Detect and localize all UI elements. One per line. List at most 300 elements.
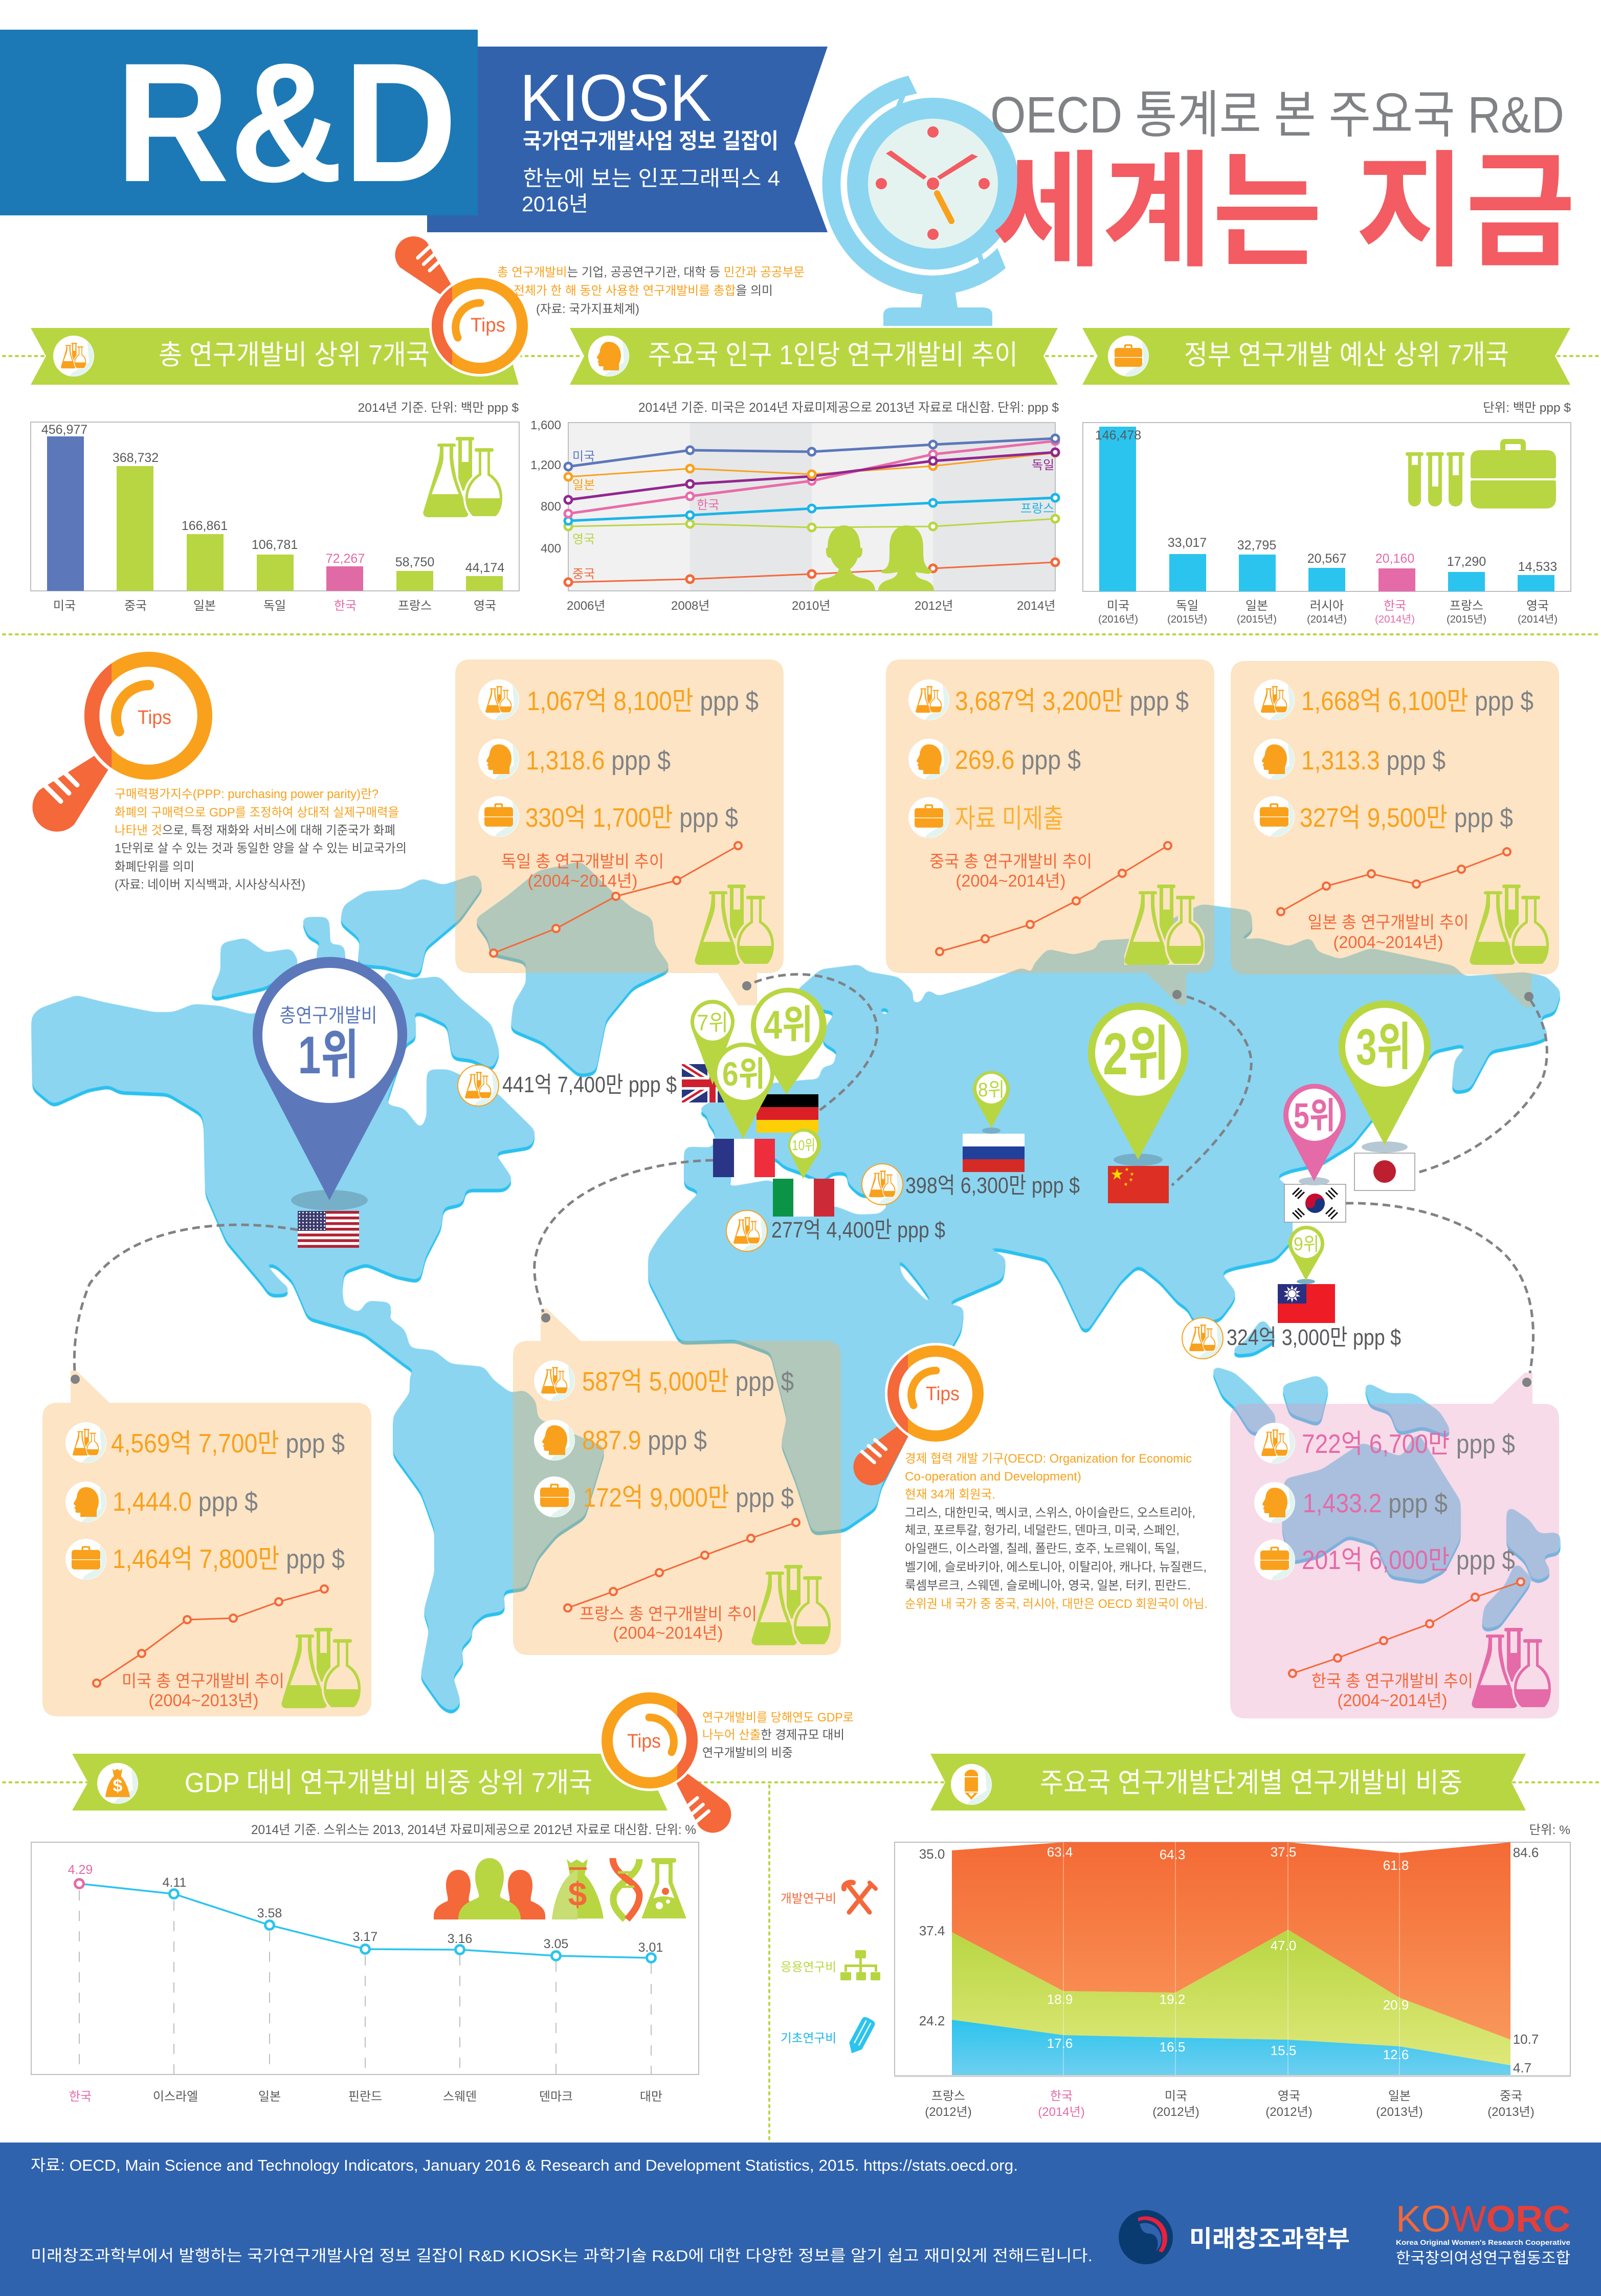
footer xyxy=(0,2143,1601,2296)
value labels: 44,174 xyxy=(465,561,504,575)
map label: UK budget xyxy=(458,1065,677,1106)
flag: China xyxy=(1108,1166,1169,1203)
footer band xyxy=(0,2143,1601,2296)
left and right labels xyxy=(919,1845,1539,2076)
pin: 6th France: 6위 xyxy=(722,1055,765,1093)
value labels: 33,017 xyxy=(1168,536,1207,550)
country labels: 러시아 xyxy=(1310,599,1344,613)
year labels: (2015년) xyxy=(1237,613,1277,625)
tips text 4: GDP ratio: 연구개발비의 비중 xyxy=(702,1746,793,1760)
map label: Taiwan budget: 324억 3,000만 ppp $ xyxy=(1227,1325,1401,1350)
left and right labels: 84.6 xyxy=(1513,1845,1539,1860)
chart frame xyxy=(31,422,519,591)
banner title: 주요국 인구 1인당 연구개발비 추이 xyxy=(648,340,1018,370)
icon: money bag: $ xyxy=(568,1875,587,1913)
inner value labels: 61.8 xyxy=(1383,1858,1409,1873)
dashed connectors xyxy=(71,975,1547,1387)
country labels xyxy=(69,2090,662,2104)
pin: 1st USA: 1위 xyxy=(298,1026,359,1085)
ministry name: 미래창조과학부 xyxy=(1189,2225,1350,2252)
figures: 269.6 ppp $ xyxy=(955,745,1081,775)
map label: Italy budget xyxy=(726,1210,945,1251)
country labels: 핀란드 xyxy=(348,2090,382,2104)
inner value labels: 12.6 xyxy=(1383,2047,1409,2062)
pin: 4th Germany xyxy=(751,988,827,1094)
tips text 2: PPP: 화폐의 구매력으로 GDP를 조정하여 상대적 실제구매력을 xyxy=(115,806,399,820)
chart note: 2014년 기준. 스위스는 2013, 2014년 자료미제공으로 2012년 자료로 대신함. 단위: % xyxy=(251,1823,696,1837)
development research area xyxy=(952,1842,1510,2040)
panel: Korea xyxy=(1254,1423,1552,1710)
trend line xyxy=(490,842,742,957)
icon: money bag xyxy=(552,1859,604,1919)
icon: flasks xyxy=(751,1565,832,1646)
panel: Japan xyxy=(1254,679,1550,966)
year labels xyxy=(1098,613,1558,625)
country labels: 한국 xyxy=(1384,599,1406,613)
pin: 9th Taiwan: 9위 xyxy=(1294,1233,1319,1254)
year labels: (2014년) xyxy=(1307,613,1347,625)
badges xyxy=(478,679,519,837)
value labels xyxy=(1095,428,1557,574)
chart frame xyxy=(895,1842,1570,2076)
year labels: (2012년) xyxy=(925,2105,972,2119)
figures: 587억 5,000만 ppp $ xyxy=(582,1367,794,1397)
tips text 3: OECD: 아일랜드, 이스라엘, 칠레, 폴란드, 호주, 노르웨이, 독일, xyxy=(905,1542,1180,1556)
logo: ministry emblem xyxy=(1119,2210,1173,2264)
icon: pencil xyxy=(951,1764,992,1805)
icon: flasks xyxy=(1124,885,1205,966)
tips text 3: OECD xyxy=(905,1452,1208,1611)
flag: Japan xyxy=(1354,1153,1415,1190)
figures: 3,687억 3,200만 ppp $ xyxy=(955,687,1189,716)
globe disc xyxy=(847,98,1019,270)
drop lines xyxy=(79,1890,651,2074)
x axis labels: 2014년 xyxy=(1017,599,1055,613)
country labels: 일본 xyxy=(1388,2089,1411,2103)
tips text 4: GDP ratio xyxy=(702,1711,854,1760)
panel: France xyxy=(534,1360,832,1646)
icon: money bag xyxy=(97,1763,138,1804)
country labels: 중국 xyxy=(124,599,147,613)
year labels: (2013년) xyxy=(1376,2105,1423,2119)
country labels xyxy=(53,599,496,613)
inner value labels: 17.6 xyxy=(1047,2036,1073,2051)
banner: R&D stages xyxy=(930,1754,1526,1811)
series names: 프랑스 xyxy=(1020,502,1054,516)
tips magnifier 2 xyxy=(23,648,216,842)
tips magnifier 4: Tips xyxy=(627,1731,661,1752)
tips text 1 xyxy=(497,266,805,316)
pin: 8th Russia xyxy=(973,1071,1010,1134)
series names: 한국 xyxy=(697,498,719,512)
value labels: 106,781 xyxy=(252,538,298,552)
trend line xyxy=(93,1585,328,1687)
flag: Germany xyxy=(757,1094,818,1133)
trend line xyxy=(1289,1578,1524,1677)
figures: 1,464억 7,800만 ppp $ xyxy=(113,1544,345,1574)
tips text 2: PPP: 1단위로 살 수 있는 것과 동일한 양을 살 수 있는 비교국가의 xyxy=(115,842,407,855)
publisher statement: 미래창조과학부에서 발행하는 국가연구개발사업 정보 길잡이 R&D KIOSK는 과학기술 R&D에 대한 다양한 정보를 알기 쉽고 재미있게 전해드립니다. xyxy=(31,2247,1093,2265)
y axis labels: 1,200 xyxy=(530,458,561,472)
country labels: 한국 xyxy=(1050,2089,1073,2103)
bars xyxy=(47,436,503,591)
inner value labels: 20.9 xyxy=(1383,1997,1409,2013)
panel: China xyxy=(908,679,1205,966)
badges xyxy=(908,679,949,838)
figures: 4,569억 7,700만 ppp $ xyxy=(111,1429,345,1459)
chart note: 단위: 백만 ppp $ xyxy=(1483,401,1571,415)
pin: 7th UK xyxy=(691,1000,735,1085)
country labels: 일본 xyxy=(258,2090,281,2104)
tips text 1: 총 연구개발비는 기업, 공공연구기관, 대학 등 민간과 공공부문 xyxy=(497,266,805,279)
badges xyxy=(1254,1423,1295,1580)
figures xyxy=(955,687,1189,834)
inner value labels: 37.5 xyxy=(1271,1844,1296,1860)
value labels: 58,750 xyxy=(395,555,434,569)
banner title: 총 연구개발비 상위 7개국 xyxy=(159,340,430,370)
trend label: 프랑스 총 연구개발비 추이 xyxy=(580,1604,757,1623)
figures: 1,318.6 ppp $ xyxy=(526,746,671,776)
year labels: (2016년) xyxy=(1098,613,1138,625)
tips text 2: PPP: 구매력평가지수(PPP: purchasing power parity)란? xyxy=(115,787,379,801)
tips text 4: GDP ratio: 나누어 산출한 경제규모 대비 xyxy=(702,1728,844,1742)
trend label xyxy=(1307,913,1469,952)
pin: 9th Taiwan xyxy=(1288,1226,1324,1284)
globe stand xyxy=(883,286,992,326)
inner value labels: 19.2 xyxy=(1160,1992,1185,2007)
value labels: 3.05 xyxy=(544,1937,568,1951)
figures: 327억 9,500만 ppp $ xyxy=(1300,803,1513,833)
year labels xyxy=(925,2105,1535,2119)
ribbon text lines: 2016년 xyxy=(522,192,588,216)
basic research area xyxy=(952,2020,1510,2076)
map label: Italy budget: 277억 4,400만 ppp $ xyxy=(771,1218,945,1243)
country labels: 스웨덴 xyxy=(443,2090,477,2104)
flag: Russia xyxy=(963,1134,1025,1172)
pin: 6th France xyxy=(713,1043,774,1139)
trend label: (2004~2014년) xyxy=(955,871,1066,890)
legend: applied: 응용연구비 xyxy=(781,1960,836,1974)
tips magnifier 1 xyxy=(388,229,530,377)
value labels: 166,861 xyxy=(182,519,228,533)
trend line xyxy=(936,842,1171,955)
figures xyxy=(1300,687,1533,833)
pin: 8th Russia: 8위 xyxy=(978,1079,1005,1101)
country labels: 일본 xyxy=(1246,599,1268,613)
map label: Taiwan budget xyxy=(1182,1318,1401,1359)
inner value labels: 16.5 xyxy=(1160,2039,1185,2055)
tips text 3: OECD: 순위권 내 국가 중 중국, 러시아, 대만은 OECD 회원국이 아님. xyxy=(905,1597,1208,1611)
ribbon text lines: 한눈에 보는 인포그래픽스 4 xyxy=(523,166,780,190)
bar chart: total R&D top 7 xyxy=(31,401,519,613)
source line: 자료: OECD, Main Science and Technology Indicators, January 2016 & Research and Development Statistics, 2015. https://stats.oecd.org. xyxy=(31,2156,1018,2174)
line chart: R&D per capita xyxy=(530,401,1059,613)
flags xyxy=(291,1064,1415,1323)
trend line xyxy=(1277,848,1510,915)
globe arm xyxy=(822,76,1006,295)
data line xyxy=(79,1884,651,1958)
country labels: 대만 xyxy=(640,2090,662,2104)
icon: flasks xyxy=(423,437,503,518)
trend label xyxy=(122,1671,284,1710)
map label: UK budget: 441억 7,400만 ppp $ xyxy=(502,1072,677,1097)
value labels: 4.11 xyxy=(163,1875,186,1890)
dotted separators xyxy=(3,356,1601,2142)
icon: briefcase xyxy=(1471,439,1556,509)
pin: 1st USA: 총연구개발비 xyxy=(279,1005,377,1027)
icon: flasks xyxy=(1472,1628,1552,1709)
figures: 1,313.3 ppp $ xyxy=(1301,746,1446,776)
pin: 5th Korea xyxy=(1283,1084,1346,1185)
country labels: 한국 xyxy=(69,2090,92,2104)
series names: 미국 xyxy=(572,450,595,463)
trend label: (2004~2014년) xyxy=(1337,1691,1448,1710)
tips text 3: OECD: 경제 협력 개발 기구(OECD: Organization for Economic xyxy=(905,1452,1192,1466)
inner value labels: 18.9 xyxy=(1047,1992,1073,2007)
tips text 2: PPP: 나타낸 것으로, 특정 재화와 서비스에 대해 기준국가 화폐 xyxy=(115,824,395,837)
figures: 자료 미제출 xyxy=(955,804,1063,834)
value labels: 3.17 xyxy=(353,1930,377,1944)
applied research area xyxy=(952,1930,1510,2065)
chart note: 2014년 기준. 미국은 2014년 자료미제공으로 2013년 자료로 대신함. 단위: ppp $ xyxy=(638,401,1059,415)
trend label: 중국 총 연구개발비 추이 xyxy=(929,852,1092,871)
value labels: 72,267 xyxy=(326,551,365,566)
globe axis ticks xyxy=(895,87,987,279)
icon: test tubes xyxy=(1406,452,1464,506)
badges xyxy=(1254,679,1295,837)
icon: briefcase xyxy=(1108,336,1149,377)
country labels: 이스라엘 xyxy=(153,2090,198,2104)
tips magnifier 4 xyxy=(599,1690,739,1840)
tips text 3: OECD: 현재 34개 회원국. xyxy=(905,1488,995,1502)
value labels: 456,977 xyxy=(41,423,87,437)
figures: 1,067억 8,100만 ppp $ xyxy=(527,687,759,716)
title line 2: 세계는 지금 xyxy=(992,142,1575,282)
figures: 1,668억 6,100만 ppp $ xyxy=(1301,687,1533,716)
series lines xyxy=(568,438,1055,582)
value labels: 368,732 xyxy=(113,451,159,465)
figures: 172억 9,000만 ppp $ xyxy=(583,1483,794,1513)
axis line xyxy=(895,2075,1570,2077)
country labels: 영국 xyxy=(1278,2089,1300,2103)
year labels: (2014년) xyxy=(1375,613,1415,625)
icon: DNA xyxy=(613,1858,639,1919)
tips text 3: OECD: 룩셈부르크, 스웨덴, 슬로베니아, 영국, 일본, 터키, 핀란드. xyxy=(905,1579,1191,1593)
flag: Korea xyxy=(1284,1184,1346,1222)
ribbon background xyxy=(427,47,828,232)
icon: lab flask xyxy=(644,1858,683,1917)
banner title: 정부 연구개발 예산 상위 7개국 xyxy=(1184,340,1509,370)
icon: flasks xyxy=(281,1628,362,1709)
tips text 2: PPP: (자료: 네이버 지식백과, 시사상식사전) xyxy=(115,878,305,892)
banner title: 주요국 연구개발단계별 연구개발비 비중 xyxy=(1040,1768,1462,1798)
x axis labels: 2006년 xyxy=(567,599,605,613)
people silhouettes xyxy=(814,525,934,591)
flag: USA xyxy=(291,1190,368,1248)
figures: 201억 6,000만 ppp $ xyxy=(1302,1546,1515,1575)
tips text 1: (자료: 국가지표체계) xyxy=(536,302,639,316)
country labels: 미국 xyxy=(1107,599,1129,613)
value labels xyxy=(41,423,504,575)
KIOSK wordmark: KIOSK xyxy=(520,60,711,135)
country labels: 영국 xyxy=(1526,599,1549,613)
tips text 2: PPP xyxy=(115,787,407,892)
map label: Russia budget xyxy=(862,1164,1080,1205)
left and right labels: 4.7 xyxy=(1513,2060,1531,2076)
trend label: 독일 총 연구개발비 추이 xyxy=(501,852,664,871)
figures xyxy=(525,687,759,833)
trend label: (2004~2013년) xyxy=(148,1691,259,1710)
tips text 3: OECD: Co-operation and Development) xyxy=(905,1470,1081,1484)
bar chart: government budget xyxy=(1083,401,1571,625)
chart note: 2014년 기준. 단위: 백만 ppp $ xyxy=(358,401,519,415)
figures: 330억 1,700만 ppp $ xyxy=(525,803,738,833)
tips text 2: PPP: 화폐단위를 의미 xyxy=(115,860,194,874)
banner: total R&D top 7 xyxy=(31,328,519,385)
year labels: (2012년) xyxy=(1265,2105,1313,2119)
tips text 3: OECD: 벨기에, 슬로바키아, 에스토니아, 이탈리아, 캐나다, 뉴질랜드, xyxy=(905,1560,1207,1574)
pin: 10th Italy xyxy=(788,1129,821,1179)
figures: 722억 6,700만 ppp $ xyxy=(1302,1429,1515,1459)
trend label: 한국 총 연구개발비 추이 xyxy=(1311,1671,1473,1690)
trend label xyxy=(501,852,664,890)
year labels: (2013년) xyxy=(1487,2105,1535,2119)
pin: 7th UK: 7위 xyxy=(697,1010,728,1035)
icon: flasks xyxy=(53,336,94,377)
country labels: 독일 xyxy=(1176,599,1198,613)
trend label: (2004~2014년) xyxy=(1333,933,1443,952)
figures: 1,433.2 ppp $ xyxy=(1303,1489,1448,1518)
legend: applied xyxy=(781,1950,880,1980)
chart note: 단위: % xyxy=(1529,1823,1570,1837)
legend: development: 개발연구비 xyxy=(781,1892,836,1906)
banner title: GDP 대비 연구개발비 비중 상위 7개국 xyxy=(185,1768,592,1798)
value labels: 17,290 xyxy=(1447,555,1486,569)
icon: head xyxy=(588,336,629,377)
tips magnifier 2: Tips xyxy=(138,707,171,728)
series names: 독일 xyxy=(1032,458,1054,472)
x axis labels: 2010년 xyxy=(792,599,830,613)
country labels: 미국 xyxy=(53,599,76,613)
ribbon text lines xyxy=(522,129,780,216)
map label: Russia budget: 398억 6,300만 ppp $ xyxy=(905,1173,1080,1198)
icon: flasks xyxy=(1470,885,1550,966)
figures: 1,444.0 ppp $ xyxy=(113,1487,258,1517)
world map xyxy=(35,865,1558,1711)
value labels: 32,795 xyxy=(1237,538,1276,553)
left and right labels: 24.2 xyxy=(919,2013,945,2028)
left and right labels: 37.4 xyxy=(919,1923,945,1938)
R&D block xyxy=(0,30,478,215)
trend label: 미국 총 연구개발비 추이 xyxy=(122,1671,284,1690)
badges xyxy=(65,1422,106,1580)
pin: 10th Italy: 10위 xyxy=(792,1137,815,1153)
value labels: 146,478 xyxy=(1095,428,1141,443)
y axis labels: 1,600 xyxy=(530,418,561,432)
map seen through peach callouts xyxy=(455,862,1538,1593)
organisation Korean name: 한국창의여성연구협동조합 xyxy=(1396,2250,1570,2267)
tips magnifier 3 xyxy=(846,1343,986,1493)
value labels xyxy=(68,1863,663,1955)
year labels: (2012년) xyxy=(1152,2105,1199,2119)
trend label xyxy=(929,852,1092,890)
value labels: 3.16 xyxy=(448,1932,472,1946)
flag: France xyxy=(713,1139,775,1177)
legend: basic: 기초연구비 xyxy=(781,2032,836,2045)
badges xyxy=(534,1360,575,1517)
tips magnifier 3: Tips xyxy=(926,1383,960,1405)
y axis labels: 800 xyxy=(541,500,561,514)
flag: Italy xyxy=(773,1179,834,1217)
inner value labels: 47.0 xyxy=(1271,1938,1296,1953)
pin: 3rd Japan: 3위 xyxy=(1356,1019,1411,1076)
value labels: 4.29 xyxy=(68,1863,93,1877)
callout backgrounds xyxy=(42,659,1559,1718)
year labels: (2014년) xyxy=(1038,2105,1085,2119)
tips text 3: OECD: 그리스, 대한민국, 멕시코, 스위스, 아이슬란드, 오스트리아, xyxy=(905,1506,1195,1520)
data markers xyxy=(75,1880,656,1962)
logo: KOWORC: KOWORC xyxy=(1396,2199,1570,2240)
left and right labels: 35.0 xyxy=(919,1846,945,1862)
bars xyxy=(1099,427,1554,591)
panel: Germany xyxy=(478,679,775,966)
pin: 4th Germany: 4위 xyxy=(763,1002,813,1047)
icon: money bag: $ xyxy=(113,1776,123,1796)
inner value labels xyxy=(1047,1844,1409,2062)
trend label xyxy=(1311,1671,1473,1710)
banner: R&D per capita xyxy=(570,328,1058,385)
panel: USA xyxy=(65,1422,362,1710)
figures xyxy=(582,1367,794,1513)
series names xyxy=(572,450,1054,581)
line chart: GDP ratio xyxy=(31,1823,699,2104)
year labels: (2015년) xyxy=(1167,613,1207,625)
icon: flasks xyxy=(695,885,775,966)
series names: 영국 xyxy=(572,533,595,546)
legend: basic xyxy=(781,2016,876,2057)
tips text 3: OECD: 체코, 포르투갈, 헝가리, 네덜란드, 덴마크, 미국, 스페인, xyxy=(905,1524,1180,1537)
series names: 일본 xyxy=(572,478,595,492)
year labels: (2014년) xyxy=(1518,613,1558,625)
flag: UK xyxy=(682,1064,724,1102)
globe clock illustration xyxy=(822,76,1019,326)
country labels: 미국 xyxy=(1165,2089,1187,2103)
trend label: (2004~2014년) xyxy=(528,871,637,890)
inner value labels: 63.4 xyxy=(1047,1844,1073,1860)
country labels: 중국 xyxy=(1500,2089,1522,2103)
country labels: 프랑스 xyxy=(1450,599,1483,613)
chart background bands xyxy=(568,423,1055,591)
pin: 1st USA xyxy=(253,957,407,1200)
value labels: 3.58 xyxy=(257,1906,282,1920)
pin: 2nd China: 2위 xyxy=(1103,1021,1169,1087)
icon: people xyxy=(434,1858,545,1919)
legend: development xyxy=(781,1883,876,1912)
trend label: (2004~2014년) xyxy=(613,1623,723,1642)
map seen through pink callout xyxy=(1233,1404,1559,1632)
chart frame xyxy=(31,1842,699,2074)
tips magnifier 1: Tips xyxy=(471,315,505,336)
pin: 2nd China xyxy=(1088,1003,1188,1166)
flag: Taiwan xyxy=(1278,1282,1335,1323)
tips text 4: GDP ratio: 연구개발비를 당해연도 GDP로 xyxy=(702,1711,854,1725)
clock marks and hands xyxy=(876,126,990,240)
trend label xyxy=(580,1604,757,1642)
x axis labels xyxy=(567,599,1055,613)
x axis labels: 2008년 xyxy=(671,599,709,613)
figures xyxy=(111,1429,345,1574)
y axis labels xyxy=(530,418,561,556)
